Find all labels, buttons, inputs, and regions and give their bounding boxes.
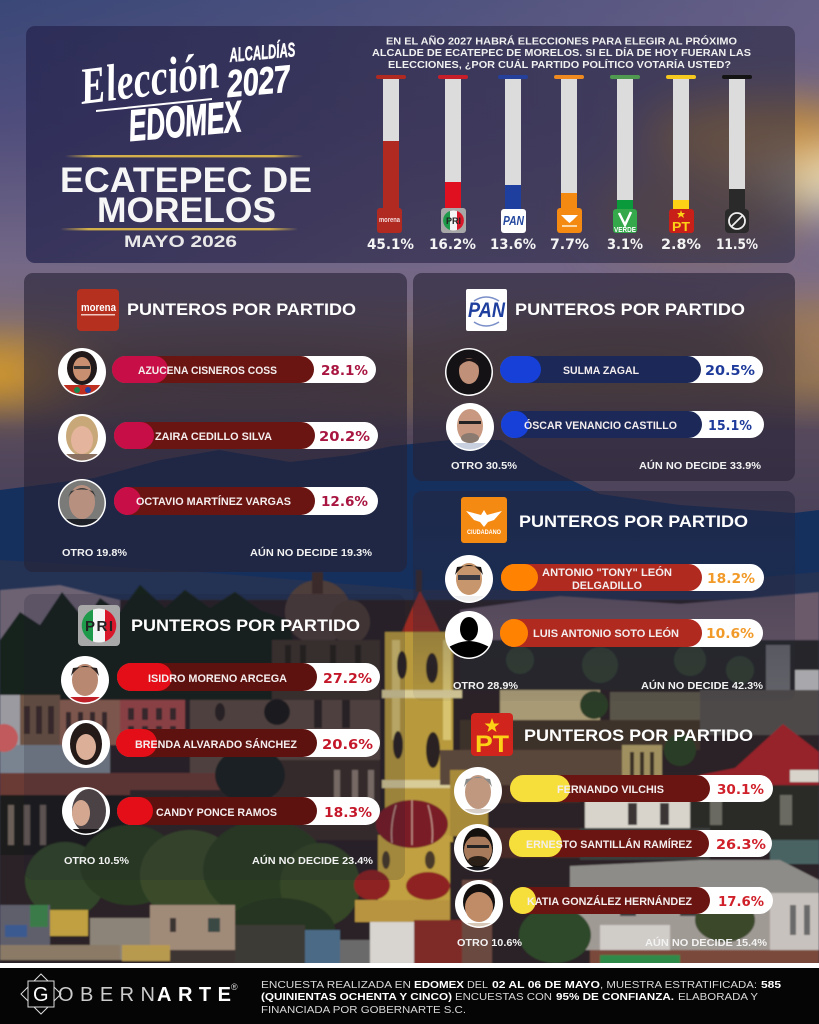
candidate row: Azucena Cisneros Coss 28.1%: AZUCENA CISNEROS COSS [138, 365, 277, 377]
panel: Morena frontrunners [24, 273, 407, 572]
candidate row: Candy Ponce Ramos 18.3%: CANDY PONCE RAMOS [156, 807, 277, 819]
undecided share: AÚN NO DECIDE 42.3% [641, 679, 764, 692]
candidate row: Ernesto Santillán Ramírez 26.3%: ERNESTO SANTILLÁN RAMÍREZ [526, 838, 692, 851]
other share: OTRO 28.9% [453, 680, 519, 692]
title lockup: Elección Edomex 2027 [76, 38, 297, 151]
survey methodology note: ENCUESTAS CON [455, 992, 552, 1003]
thermometer: PT 2.8% [661, 75, 701, 253]
survey methodology note: 585 [761, 980, 782, 991]
candidate row: Katia González Hernández 17.6%: KATIA GONZÁLEZ HERNÁNDEZ [527, 895, 692, 908]
panel background [24, 273, 407, 572]
thermometer: PAN 13.6%: PAN [503, 213, 524, 228]
candidate row: Óscar Venancio Castillo 15.1%: 15.1% [708, 418, 752, 434]
thermometer: Morena 45.1% [367, 75, 414, 253]
candidate row: Fernando Vilchis 30.1% [454, 767, 773, 817]
gold divider [65, 155, 303, 157]
heading: PUNTEROS POR PARTIDO [127, 300, 356, 319]
logo: Morena [77, 289, 119, 331]
survey methodology note: ENCUESTA REALIZADA EN [261, 980, 411, 991]
thermometer: Morena 45.1%: morena [379, 217, 400, 224]
thermometer: PAN 13.6%: 13.6% [490, 237, 536, 253]
logo: PRI [78, 605, 120, 646]
avatar [58, 348, 106, 399]
title lockup: Elección Edomex 2027: EDOMEX [127, 92, 245, 151]
gold divider [60, 228, 298, 230]
candidate row: Antonio "Tony" León Delgadillo 18.2%: ANTONIO "TONY" LEÓN [542, 566, 672, 579]
candidate row: Zaira Cedillo Silva 20.2%: 20.2% [319, 429, 371, 445]
other share: OTRO 19.8% [62, 547, 128, 559]
logo: PRI: PRI [85, 618, 113, 635]
candidate row: Fernando Vilchis 30.1%: FERNANDO VILCHIS [557, 784, 664, 796]
panel: PRI frontrunners [24, 594, 405, 880]
candidate row: Katia González Hernández 17.6% [455, 880, 773, 930]
thermometer: Verde 3.1%: 3.1% [607, 237, 643, 253]
avatar [445, 348, 493, 396]
panel background [24, 594, 405, 880]
avatar: silhouette [445, 611, 493, 659]
panel background [413, 491, 795, 701]
heading: Ecatepec de Morelos: ECATEPEC DE [60, 161, 312, 200]
undecided share: AÚN NO DECIDE 33.9% [639, 459, 762, 472]
thermometer: PT 2.8%: PT [672, 219, 690, 234]
heading: PUNTEROS POR PARTIDO [519, 512, 748, 531]
survey methodology note: FINANCIADA POR GOBERNARTE S.C. [261, 1005, 466, 1016]
thermometer: no answer 11.5%: 11.5% [716, 237, 758, 253]
survey methodology note [261, 980, 782, 1016]
hills [460, 592, 819, 660]
candidate row: Isidro Moreno Arcega 27.2%: ISIDRO MORENO ARCEGA [148, 673, 287, 685]
avatar [61, 656, 109, 705]
logo: Gobernarte: ® [231, 982, 238, 992]
footer bar [0, 963, 819, 1024]
candidate row: Óscar Venancio Castillo 15.1%: ÓSCAR VENANCIO CASTILLO [524, 419, 677, 432]
undecided share: AÚN NO DECIDE 23.4% [252, 854, 374, 867]
thermometer: Morena 45.1%: 45.1% [367, 237, 414, 253]
candidate row: Luis Antonio Soto León 10.6%: LUIS ANTONIO SOTO LEÓN [533, 627, 679, 640]
thermometer: PAN 13.6% [490, 75, 536, 253]
panel: PAN frontrunners [413, 273, 795, 481]
candidate row: Brenda Alvarado Sánchez 20.6%: BRENDA ALVARADO SÁNCHEZ [135, 738, 297, 751]
panel background [26, 26, 795, 263]
heading: PUNTEROS POR PARTIDO [131, 616, 360, 635]
title lockup: Elección Edomex 2027: ALCALDÍAS [228, 38, 297, 67]
avatar [62, 720, 110, 768]
candidate row: Zaira Cedillo Silva 20.2% [58, 414, 378, 464]
candidate row: Isidro Moreno Arcega 27.2% [61, 656, 380, 705]
title lockup: Elección Edomex 2027: 2027 [224, 59, 293, 106]
candidate row: Candy Ponce Ramos 18.3%: 18.3% [324, 805, 372, 821]
panel: title and national preference chart [26, 26, 795, 263]
thermometer: Verde 3.1% [607, 75, 643, 253]
logo: PT [471, 713, 513, 758]
logo: Movimiento Ciudadano: CIUDADANO [467, 530, 501, 536]
survey question [372, 34, 751, 71]
thermometer: PRI 16.2%: PRI [446, 216, 461, 226]
candidate row: Óscar Venancio Castillo 15.1% [446, 403, 764, 453]
thermometer: PT 2.8%: 2.8% [661, 237, 701, 253]
logo: Movimiento Ciudadano [461, 497, 507, 543]
candidate row: Sulma Zagal 20.5%: SULMA ZAGAL [563, 365, 639, 377]
candidate row: Azucena Cisneros Coss 28.1% [58, 348, 376, 399]
candidate row: Katia González Hernández 17.6%: 17.6% [718, 894, 764, 910]
logo: Gobernarte: OBERN [58, 984, 155, 1006]
candidate row: Octavio Martínez Vargas 12.6%: OCTAVIO MARTÍNEZ VARGAS [136, 495, 291, 508]
avatar [445, 555, 493, 604]
dark trees [0, 585, 300, 700]
logo: Gobernarte: G [33, 984, 49, 1006]
logo: PAN: PAN [468, 299, 506, 322]
bottom left houses [0, 905, 50, 960]
candidate row: Ernesto Santillán Ramírez 26.3% [454, 824, 772, 874]
survey question: EN EL AÑO 2027 HABRÁ ELECCIONES PARA ELEGIR AL PRÓXIMO [386, 34, 737, 48]
heading: PUNTEROS POR PARTIDO [524, 726, 753, 745]
heading: Ecatepec de Morelos [60, 161, 312, 230]
panel: PT frontrunners [454, 713, 773, 949]
candidate row: Antonio "Tony" León Delgadillo 18.2% [445, 555, 764, 604]
candidate row: Zaira Cedillo Silva 20.2%: ZAIRA CEDILLO SILVA [155, 431, 272, 443]
avatar [454, 824, 502, 874]
candidate row: Antonio "Tony" León Delgadillo 18.2%: 18.2% [707, 571, 755, 587]
candidate row: Octavio Martínez Vargas 12.6%: 12.6% [321, 494, 368, 510]
survey methodology note: DEL [467, 980, 488, 991]
thermometer: Verde 3.1%: VERDE [614, 227, 636, 234]
heading: PUNTEROS POR PARTIDO [515, 300, 745, 319]
other share: OTRO 30.5% [451, 460, 518, 472]
green trees [25, 820, 360, 962]
survey methodology note: 02 AL 06 DE MAYO [492, 980, 600, 991]
title lockup: Elección Edomex 2027: Elección [76, 42, 222, 116]
heading: Ecatepec de Morelos: MORELOS [97, 191, 276, 230]
left town [0, 695, 20, 745]
thermometer: no answer 11.5% [716, 75, 758, 253]
logo: PAN [466, 289, 507, 331]
candidate row: Azucena Cisneros Coss 28.1%: 28.1% [321, 363, 368, 379]
panel background [413, 273, 795, 481]
logo: PT: PT [475, 731, 509, 758]
avatar [62, 787, 110, 837]
candidate row: Brenda Alvarado Sánchez 20.6% [62, 720, 380, 768]
thermometer: Movimiento Ciudadano 7.7%: 7.7% [550, 237, 589, 253]
avatar [58, 479, 106, 529]
survey methodology note: (QUINIENTAS OCHENTA Y CINCO) [261, 992, 452, 1003]
survey question: ALCALDE DE ECATEPEC DE MORELOS. SI EL DÍA DE HOY FUERAN LAS [372, 46, 751, 59]
undecided share: AÚN NO DECIDE 15.4% [645, 936, 768, 949]
date: Mayo 2026: MAYO 2026 [124, 232, 237, 251]
bell tower [385, 632, 453, 842]
avatar [455, 880, 503, 930]
thermometer: PRI 16.2%: 16.2% [429, 237, 476, 253]
thermometer: Movimiento Ciudadano 7.7% [550, 75, 589, 253]
candidate row: Luis Antonio Soto León 10.6%: 10.6% [706, 626, 754, 642]
candidate row: Candy Ponce Ramos 18.3% [62, 787, 380, 837]
yellow chapel and dome [378, 835, 450, 917]
candidate row: Brenda Alvarado Sánchez 20.6%: 20.6% [322, 737, 374, 753]
logo: Morena: morena [81, 302, 117, 314]
candidate row: Octavio Martínez Vargas 12.6% [58, 479, 378, 529]
logo: Gobernarte [21, 974, 238, 1014]
candidate row: Sulma Zagal 20.5%: 20.5% [705, 363, 755, 379]
candidate row: Fernando Vilchis 30.1%: 30.1% [717, 782, 764, 798]
candidate row: Ernesto Santillán Ramírez 26.3%: 26.3% [716, 837, 766, 853]
avatar [454, 767, 502, 817]
other share: OTRO 10.5% [64, 855, 130, 867]
survey question: ELECCIONES, ¿POR CUÁL PARTIDO POLÍTICO VOTARÍA USTED? [388, 58, 731, 71]
survey methodology note: ELABORADA Y [678, 992, 758, 1003]
avatar [446, 403, 494, 453]
avatar [58, 414, 106, 464]
candidate row: Sulma Zagal 20.5% [445, 348, 763, 396]
thermometer: PRI 16.2% [429, 75, 476, 253]
candidate row: Luis Antonio Soto León 10.6% [445, 611, 763, 659]
survey methodology note: , MUESTRA ESTRATIFICADA: [600, 980, 757, 991]
survey methodology note: EDOMEX [414, 980, 464, 991]
panel: Movimiento Ciudadano frontrunners [413, 491, 795, 701]
undecided share: AÚN NO DECIDE 19.3% [250, 546, 373, 559]
other share: OTRO 10.6% [457, 937, 523, 949]
candidate row: Antonio "Tony" León Delgadillo 18.2%: DELGADILLO [572, 580, 642, 592]
right town [460, 640, 819, 690]
candidate row: Isidro Moreno Arcega 27.2%: 27.2% [323, 671, 372, 687]
cathedral [285, 580, 351, 644]
logo: Gobernarte: ARTE [157, 984, 231, 1006]
survey methodology note: 95% DE CONFIANZA. [556, 992, 674, 1003]
